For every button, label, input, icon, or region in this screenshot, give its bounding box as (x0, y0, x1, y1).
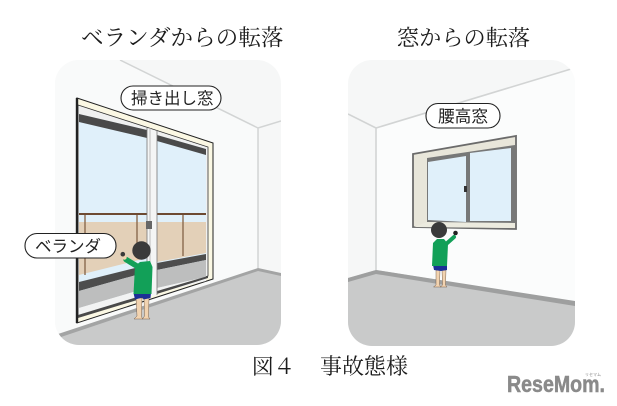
panel: window scene (348, 60, 575, 346)
label: waist-high window (426, 104, 500, 128)
label: sweep-out window: 掃き出し窓 (131, 89, 214, 108)
panel: veranda scene (25, 60, 281, 345)
waist-high window (413, 136, 516, 229)
label: veranda: ベランダ (35, 237, 101, 256)
child at waist-high window (431, 222, 458, 287)
logo: ReseMom: リセマム (585, 372, 601, 377)
label: veranda (25, 234, 116, 258)
caption: 事故態様 (320, 354, 408, 379)
sliding window (77, 98, 213, 323)
title: window fall: 窓からの転落 (397, 26, 530, 50)
label: sweep-out window (121, 86, 221, 110)
label: waist-high window: 腰高窓 (438, 107, 488, 126)
balcony wall (79, 214, 206, 308)
child at sliding window (120, 241, 152, 319)
caption (252, 354, 408, 379)
title: veranda fall: ベランダからの転落 (81, 26, 283, 50)
caption: 図４ (252, 355, 295, 379)
